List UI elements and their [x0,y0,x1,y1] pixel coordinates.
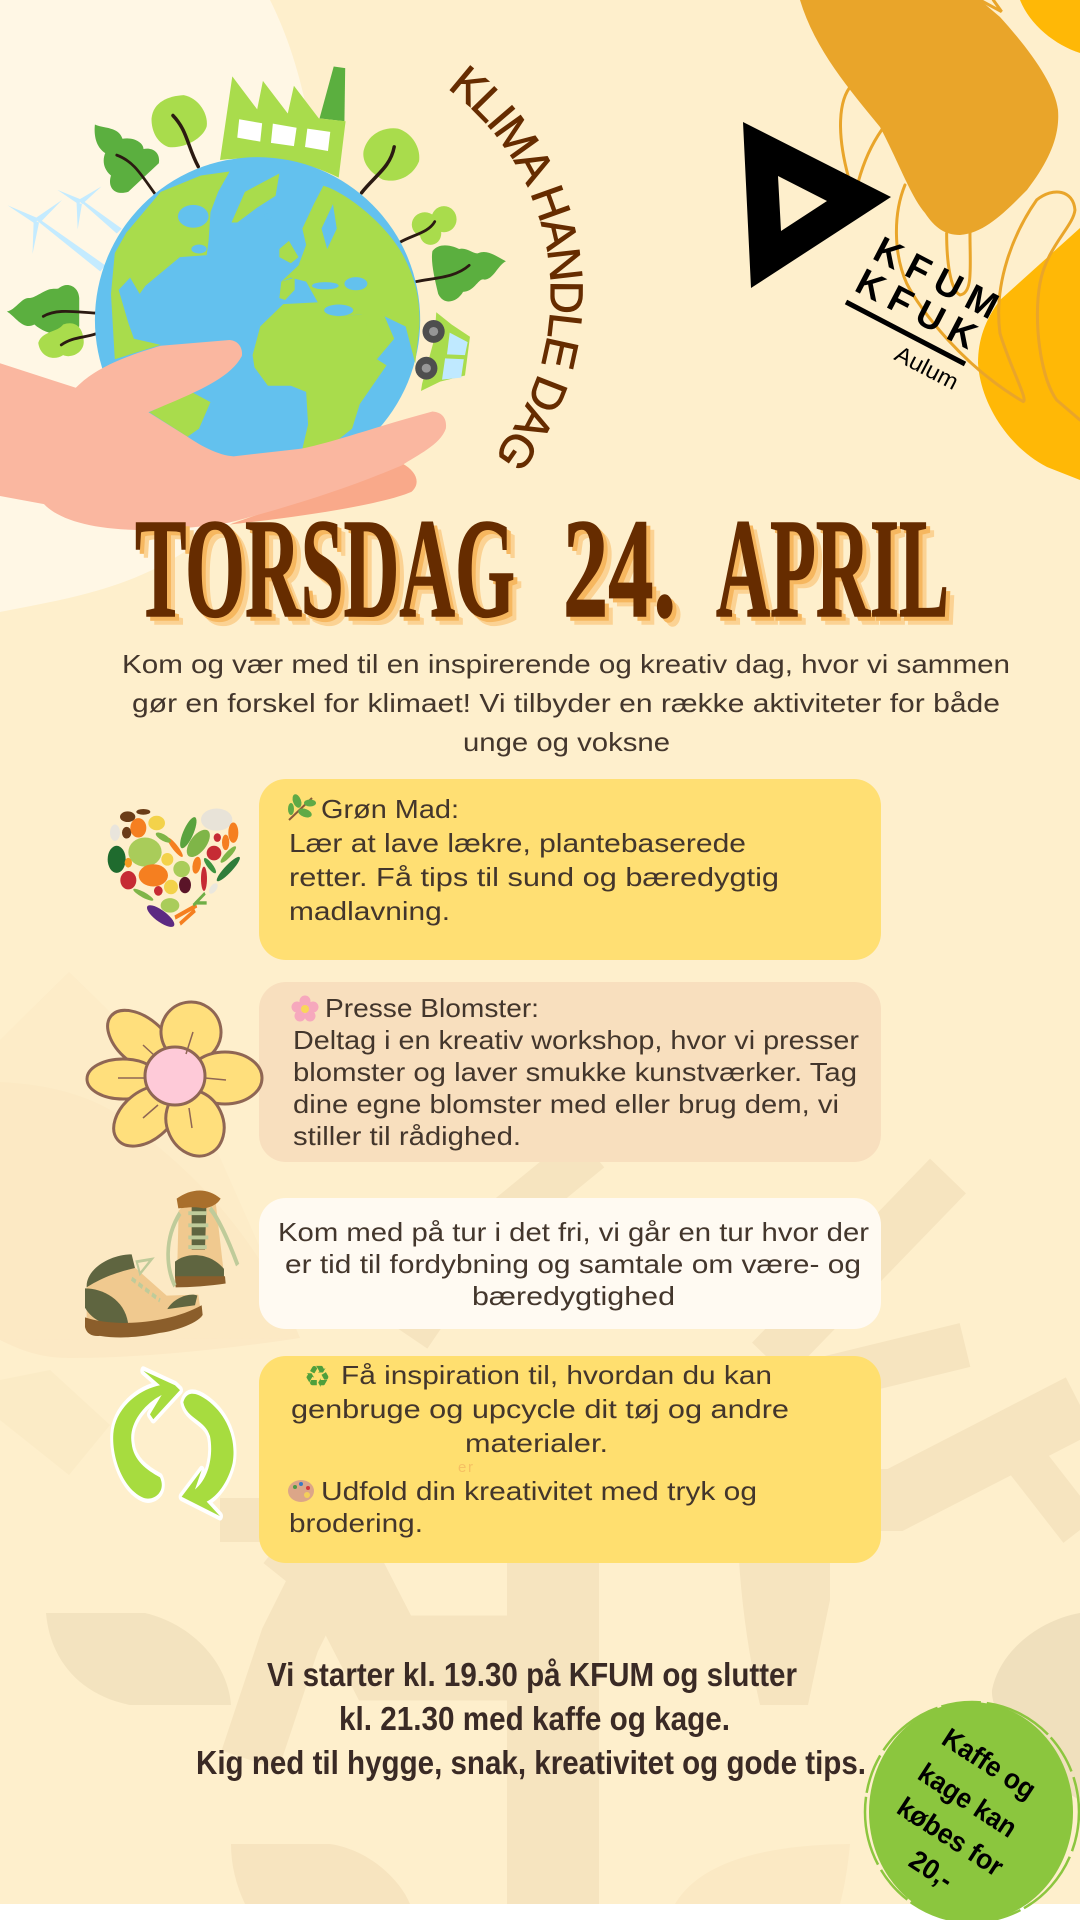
callout: coffee and cake price [865,1702,1079,1920]
panel: genbrug og kreativitet: brodering. [289,1508,423,1538]
logo: KFUM KFUK Aulum [743,122,1005,395]
callout: coffee and cake price: 20,- [904,1844,959,1895]
panel: tur i det fri: Kom med på tur i det fri, vi går en tur hvor der [278,1217,869,1247]
panel: tur i det fri [259,1198,881,1329]
text: practical info: Kig ned til hygge, snak, kreativitet og gode tips. [196,1744,866,1781]
icon: palette [288,1480,314,1502]
panel: genbrug og kreativitet: Få inspiration til, hvordan du kan [341,1360,772,1390]
illustration: globe held in hand [0,67,506,530]
icon: triangle logo mark [743,122,891,288]
title: Torsdag 24. april: TORSDAG [135,489,515,647]
logo text [849,229,1005,395]
icon: wind turbines [8,187,122,271]
icon: pink blossom [292,996,318,1022]
icon: green car [415,312,470,391]
callout: coffee and cake price: Kaffe og [937,1722,1042,1805]
intro text: gør en forskel for klimaet! Vi tilbyder en række aktiviteter for både [132,688,1000,718]
panel: genbrug og kreativitet [259,1356,881,1563]
panel: Presse Blomster: Deltag i en kreativ workshop, hvor vi presser [293,1025,859,1055]
intro text: Kom og vær med til en inspirerende og kreativ dag, hvor vi sammen [122,649,1010,679]
panel: Grøn Mad: madlavning. [289,896,450,926]
panel: Presse Blomster: stiller til rådighed. [293,1121,521,1151]
text: practical info [196,1656,866,1781]
intro text: unge og voksne [463,727,670,757]
panel: Grøn Mad: Grøn Mad: [321,794,459,824]
panel: Presse Blomster: dine egne blomster med eller brug dem, vi [293,1089,839,1119]
callout: coffee and cake price: kage kan [913,1757,1023,1843]
title: Torsdag 24. april: 24. [563,489,676,647]
decoration: yellow corner blobs [978,0,1080,480]
icon: factory [220,67,346,178]
icon: hand [0,340,446,530]
text: practical info: Vi starter kl. 19.30 på KFUM og slutter [267,1656,797,1693]
icon: herb sprig [288,793,316,820]
decoration: orange blob [800,0,1058,235]
panel: genbrug og kreativitet: Udfold din kreativitet med tryk og [321,1476,757,1506]
text: practical info: kl. 21.30 med kaffe og kage. [339,1700,730,1737]
icon: hiking boots [85,1190,238,1337]
icon: recycling: ♻ [304,1360,331,1395]
logo text: Aulum [891,340,963,395]
icon: trees around the globe [7,95,506,358]
decoration: orange outlines [841,0,1080,420]
callout: coffee and cake price: købes for [892,1791,1009,1882]
icon: vegetable heart [108,808,242,931]
panel: Presse Blomster: blomster og laver smukke kunstværker. Tag [293,1057,857,1087]
heading: Klima Handle Dag curved: KLIMA HANDLE DAG [450,65,583,468]
panel: Presse Blomster: Presse Blomster: [325,993,539,1023]
panel: genbrug og kreativitet: genbruge og upcycle dit tøj og andre [291,1394,789,1424]
intro text [122,649,1010,757]
panel: genbrug og kreativitet: er [458,1459,473,1476]
logo text: KFUM [867,229,1005,327]
icon: globe [95,157,420,483]
panel: tur i det fri: er tid til fordybning og samtale om være- og [285,1249,861,1279]
panel: genbrug og kreativitet: materialer. [465,1428,608,1458]
panel: Grøn Mad: retter. Få tips til sund og bæredygtig [289,862,779,892]
panel: Grøn Mad: Lær at lave lækre, plantebaserede [289,828,746,858]
panel: Presse Blomster [259,982,881,1162]
panel: Grøn Mad [259,779,881,960]
logo text: KFUK [849,261,984,357]
icon: green recycling arrows [113,1371,234,1516]
panel: tur i det fri: bæredygtighed [472,1281,675,1311]
icon: flower [87,990,262,1166]
